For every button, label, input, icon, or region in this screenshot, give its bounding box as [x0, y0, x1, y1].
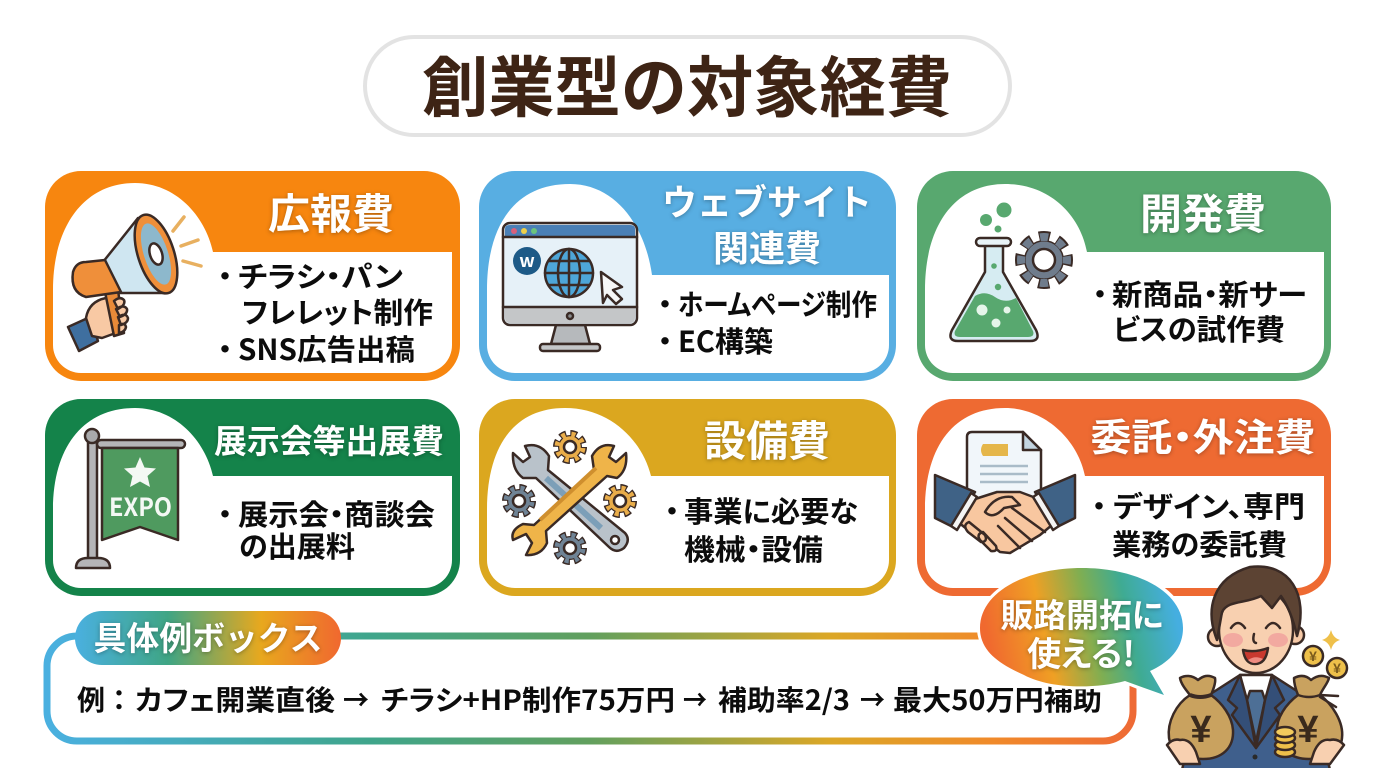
- speech bubble: [977, 565, 1187, 698]
- list: ・: [210, 492, 240, 534]
- example box: [47, 636, 1133, 741]
- list: 業務の委託費: [1112, 522, 1287, 564]
- panel: 広報費: [45, 171, 460, 381]
- list: ・: [657, 489, 687, 531]
- icon: crossed wrenches and gears: [506, 434, 633, 561]
- panel: 委託・外注費: [917, 399, 1331, 596]
- list: ・: [210, 327, 240, 369]
- example text: →: [683, 679, 707, 719]
- list: ・: [1085, 272, 1115, 314]
- list: の出展料: [239, 524, 355, 566]
- heading: 関連費: [713, 220, 821, 272]
- panel: ウェブサイト関連費: [479, 171, 896, 381]
- list: フレレット制作: [242, 290, 433, 332]
- title: 創業型の対象経費: [422, 35, 952, 131]
- list: ・: [650, 319, 680, 361]
- list: ・: [1084, 484, 1114, 526]
- character: businessman with money bags: [1167, 566, 1347, 768]
- list: チラシ・パン: [238, 254, 403, 296]
- list: [1084, 484, 1305, 564]
- heading: ウェブサイト: [662, 174, 872, 226]
- character: businessman with money bags: ¥: [1297, 709, 1319, 751]
- icon: expo flag: [76, 429, 185, 568]
- heading: 広報費: [268, 181, 394, 242]
- list: EC構築: [678, 319, 773, 361]
- icon: megaphone: [68, 209, 201, 351]
- list: ・: [650, 282, 680, 324]
- icon: monitor: [503, 223, 637, 351]
- tag: 具体例ボックス: 具体例ボックス: [94, 612, 322, 660]
- list: 新商品・新サー: [1112, 272, 1307, 314]
- list: [650, 282, 877, 361]
- character: businessman with money bags: ¥: [1309, 648, 1317, 664]
- speech bubble: 使える!: [1027, 627, 1135, 676]
- heading: 展示会等出展費: [214, 415, 444, 463]
- list: [210, 254, 433, 369]
- panel: 開発費: [917, 171, 1331, 381]
- list: ホームページ制作: [678, 282, 877, 324]
- heading: 設備費: [704, 408, 830, 469]
- heading: [662, 174, 872, 272]
- panel: 設備費: [479, 399, 896, 596]
- example text: →: [860, 679, 885, 719]
- character: businessman with money bags: ¥: [1190, 709, 1212, 751]
- list: [210, 492, 435, 566]
- panel: 展示会等出展費: [45, 399, 460, 596]
- heading: 開発費: [1140, 181, 1266, 242]
- example text: カフェ開業直後: [135, 679, 335, 719]
- list: ・: [210, 254, 240, 296]
- list: 展示会・商談会: [238, 492, 435, 534]
- icon: monitor: w: [519, 247, 535, 273]
- list: デザイン、専門: [1113, 484, 1305, 526]
- example text: →: [343, 679, 369, 719]
- example text: [77, 679, 1102, 719]
- list: 機械・設備: [684, 527, 823, 569]
- icon: flask and gear: [950, 202, 1067, 341]
- example text: 補助率2/3: [718, 679, 850, 719]
- icon: expo flag: EXPO: [109, 488, 172, 524]
- list: [657, 489, 858, 569]
- example text: 例：: [77, 679, 133, 719]
- example text: チラシ+HP制作75万円: [381, 679, 675, 719]
- list: [1085, 272, 1307, 349]
- character: businessman with money bags: ¥: [1333, 660, 1341, 676]
- list: 事業に必要な: [684, 489, 858, 531]
- icon: contract and handshake: [935, 432, 1075, 553]
- heading: 委託・外注費: [1090, 407, 1316, 462]
- list: SNS広告出稿: [238, 327, 415, 369]
- list: ビスの試作費: [1113, 307, 1285, 349]
- speech bubble: 販路開拓に: [1000, 589, 1164, 637]
- example text: 最大50万円補助: [893, 679, 1102, 719]
